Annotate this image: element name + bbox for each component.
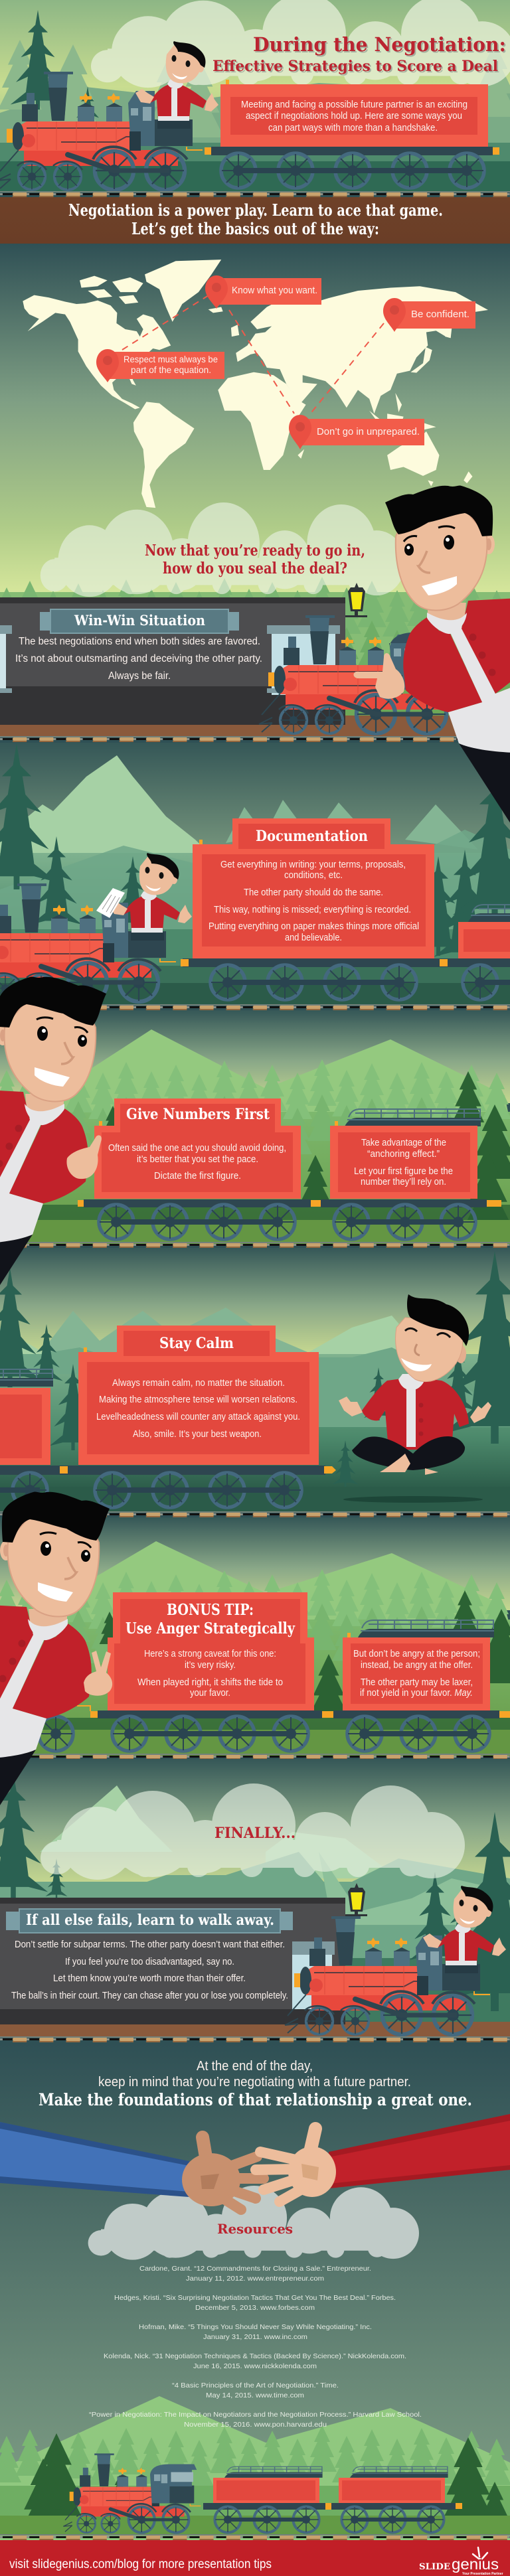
callout: know what you want — [205, 275, 321, 309]
mountains: closing — [0, 2396, 510, 2542]
forest: closing — [0, 2425, 510, 2486]
wagon: give numbers left — [78, 1099, 311, 1239]
text: walk away body: If you feel you’re too disadvantaged, say no. — [65, 1957, 234, 1967]
text: walk away body: The ball’s in their court. They can chase after you or lose you completely. — [11, 1991, 288, 2001]
heading: stay calm: Stay Calm — [159, 1335, 234, 1352]
text: stay calm body — [96, 1378, 300, 1440]
text: closing statement — [39, 2059, 472, 2109]
title: During the Negotiation: — [254, 35, 507, 57]
panel: world map background — [0, 244, 510, 725]
text: bonus right: if not yield in your favor. May. — [360, 1688, 473, 1699]
icon: document — [96, 888, 125, 918]
character: conductor in header — [135, 41, 218, 121]
locomotive: closing — [63, 2453, 201, 2533]
text: documentation body: This way, nothing is missed; everything is recorded. — [214, 905, 411, 915]
locomotive: win-win — [259, 615, 464, 733]
footer: Your Presentation Partner — [462, 2572, 503, 2576]
character: thumbs up man — [0, 977, 106, 1326]
text: bonus right: The other party may be laxer, — [361, 1677, 473, 1688]
panel: brown banner: Let’s get the basics out of the way: — [131, 219, 379, 238]
callout: be confident — [383, 298, 475, 332]
text: give numbers right: number they’ll rely on. — [361, 1177, 446, 1187]
text: closing statement: keep in mind that you’re negotiating with a future partner. — [98, 2075, 411, 2089]
text: win-win body: The best negotiations end when both sides are favored. — [19, 636, 260, 647]
heading: question — [145, 542, 365, 577]
panel: documentation background — [0, 743, 510, 1005]
panel: stay calm background — [0, 1248, 510, 1512]
callout: don't go in unprepared: Don’t go in unprepared. — [317, 426, 420, 437]
heading: resources: Resources — [217, 2221, 293, 2237]
locomotive: finally — [285, 1916, 490, 2034]
trees: closing dark — [20, 2433, 510, 2533]
icon: handshake arms — [0, 2114, 510, 2210]
text: give numbers left — [108, 1143, 286, 1181]
wagon: give numbers right — [311, 1109, 501, 1239]
text: walk away body: Don’t settle for subpar terms. The other party doesn’t want that either. — [15, 1939, 285, 1950]
trees: bonus dark — [100, 1590, 510, 1714]
heading: bonus tip: BONUS TIP: — [167, 1601, 254, 1619]
text: citations: June 16, 2015. www.nickkolenda.com — [193, 2362, 317, 2370]
trees: give numbers dark — [100, 1071, 510, 1225]
text: walk away body: Let them know you’re worth more than their offer. — [53, 1973, 246, 1984]
text: stay calm body: Always remain calm, no matter the situation. — [112, 1378, 285, 1389]
forest: behind station — [0, 577, 510, 638]
footer: visit slidegenius.com/blog for more presentation tips — [9, 2557, 272, 2571]
wagon: stay calm — [0, 1326, 336, 1507]
text: give numbers right: Take advantage of the — [361, 1138, 446, 1148]
footer — [0, 2540, 510, 2576]
text: intro paragraph: Meeting and facing a possible future partner is an exciting — [241, 100, 468, 110]
text: bonus left: it’s very risky. — [185, 1660, 236, 1671]
text: give numbers left: Dictate the first figure. — [154, 1171, 241, 1181]
text: bonus left: When played right, it shifts the tide to — [137, 1677, 283, 1688]
title: During the Negotiation: — [253, 33, 506, 56]
text: citations: Cardone, Grant. “12 Commandments for Closing a Sale.” Entrepreneur. — [139, 2265, 371, 2273]
text: stay calm body: Levelheadedness will counter any attack against you. — [96, 1412, 300, 1422]
text: give numbers right — [354, 1138, 453, 1187]
heading: finally: FINALLY... — [214, 1825, 296, 1842]
trees: documentation pines — [0, 743, 510, 962]
text: citations: January 11, 2012. www.entrepreneur.com — [186, 2275, 324, 2283]
text: documentation body: and believable. — [285, 933, 342, 943]
text: give numbers right: Let your first figure be the — [354, 1166, 453, 1177]
text: win-win body — [15, 636, 262, 682]
heading: win-win banner: Win-Win Situation — [74, 612, 205, 629]
text: bonus left: Here’s a strong caveat for this one: — [144, 1649, 276, 1659]
character: peace sign man — [0, 1492, 112, 1841]
text: citations: Kolenda, Nick. “31 Negotiation Techniques & Tactics (Backed By Science).” NickKolenda.com. — [104, 2352, 406, 2360]
text: bonus right: instead, be angry at the offer. — [361, 1660, 473, 1671]
text: closing statement: At the end of the day, — [197, 2059, 313, 2074]
heading: bonus tip — [126, 1601, 296, 1637]
text: win-win body: Always be fair. — [108, 670, 171, 682]
text: stay calm body: Making the atmosphere tense will worsen relations. — [99, 1395, 298, 1405]
panel: win-win station — [0, 597, 345, 725]
route: dashed lines between pins — [122, 295, 384, 415]
footer: SLIDE — [419, 2562, 450, 2572]
locomotive wheel: bonus — [39, 1716, 73, 1751]
text: win-win body: It’s not about outsmarting and deceiving the other party. — [15, 653, 262, 664]
text: citations: May 14, 2015. www.time.com — [206, 2391, 304, 2399]
ground: finally — [0, 2022, 510, 2038]
callout: don't go in unprepared — [289, 415, 424, 449]
heading: walk away banner: If all else fails, learn to walk away. — [26, 1912, 274, 1929]
heading: win-win banner — [40, 609, 239, 633]
heading: question: how do you seal the deal? — [163, 560, 347, 577]
text: give numbers left: Often said the one act you should avoid doing, — [108, 1143, 286, 1154]
wagon: documentation — [181, 818, 510, 1000]
wagons: closing — [203, 2466, 462, 2533]
text: documentation body: The other party should do the same. — [244, 887, 383, 898]
text: intro paragraph: aspect if negotiations hold up. Here are some ways you — [246, 111, 462, 121]
character: pointing man — [353, 486, 510, 835]
panel: header scene — [0, 0, 510, 192]
cloud: header — [91, 0, 510, 88]
text: give numbers left: it’s better that you set the pace. — [137, 1154, 258, 1165]
title: Effective Strategies to Score a Deal — [212, 58, 498, 75]
text: documentation body: Putting everything on paper makes things more official — [209, 921, 419, 932]
locomotive: header — [0, 72, 203, 190]
text: citations — [89, 2265, 422, 2429]
text: citations: January 31, 2011. www.inc.com — [203, 2333, 307, 2341]
cloud: resources — [88, 2186, 419, 2260]
character: meditating — [339, 1294, 491, 1503]
title: Effective Strategies to Score a Deal — [214, 59, 499, 76]
wagon: header intro — [205, 80, 499, 188]
text: documentation body: Get everything in writing: your terms, proposals, — [220, 860, 406, 870]
cloud: question — [41, 502, 405, 597]
text: citations: “4 Basic Principles of the Art of Negotiation.” Time. — [172, 2382, 339, 2389]
tree: header pine — [11, 10, 106, 153]
callout: be confident: Be confident. — [411, 309, 469, 320]
text: documentation body — [209, 860, 419, 943]
footer: genius — [452, 2555, 499, 2573]
panel: bonus tip background — [0, 1517, 510, 1756]
locomotive: documentation — [0, 883, 176, 1002]
text: intro paragraph: can part ways with more than a handshake. — [268, 123, 438, 133]
icon: street lamp finally — [345, 1883, 367, 1916]
heading: walk away banner — [6, 1909, 293, 1933]
text: citations: “Power in Negotiation: The Impact on Negotiators and the Negotiation Process.” Harvard Law School. — [89, 2411, 422, 2419]
text: citations: November 15, 2016. www.pon.harvard.edu — [184, 2421, 327, 2429]
text: stay calm body: Also, smile. It’s your best weapon. — [133, 1429, 262, 1440]
text: citations: Hedges, Kristi. “Six Surprising Negotiation Tactics That Get You The Best Deal.” Forbes. — [114, 2294, 396, 2302]
panel: finally station — [0, 1898, 345, 2024]
text: bonus left — [137, 1649, 283, 1699]
cloud: finally — [41, 1783, 465, 1880]
map: world continents — [23, 260, 488, 508]
text: walk away body — [11, 1939, 288, 2001]
character: holding document — [109, 853, 192, 933]
text: intro paragraph — [241, 100, 468, 133]
character: conductor finally — [423, 1886, 506, 1965]
text: bonus right: But don’t be angry at the person; — [353, 1649, 480, 1659]
panel: brown banner — [0, 197, 510, 244]
forest: give numbers — [0, 1059, 510, 1120]
text: bonus left: your favor. — [190, 1688, 230, 1699]
heading: documentation: Documentation — [256, 828, 368, 845]
callout: respect: part of the equation. — [131, 364, 211, 375]
callout: respect: Respect must always be — [124, 354, 218, 364]
ground: win-win — [0, 677, 510, 737]
text: citations: December 5, 2013. www.forbes.com — [195, 2304, 315, 2312]
panel: finally background — [0, 1759, 510, 2038]
text: citations: Hofman, Mike. “5 Things You Should Never Say While Negotiating.” Inc. — [139, 2323, 372, 2331]
wagon: bonus right — [322, 1620, 510, 1751]
panel: closing background — [0, 2043, 510, 2541]
heading: give numbers first: Give Numbers First — [126, 1106, 270, 1123]
title — [212, 33, 507, 76]
text: bonus right — [353, 1649, 480, 1699]
wagon: bonus left — [77, 1592, 322, 1751]
trees: stay calm pines — [0, 1251, 510, 1487]
forest: bonus — [0, 1569, 510, 1630]
callout: respect — [96, 349, 224, 382]
heading: bonus tip: Use Anger Strategically — [126, 1620, 296, 1637]
trees: finally pines — [0, 1772, 510, 2011]
text: give numbers right: “anchoring effect.” — [367, 1149, 440, 1160]
heading: question: Now that you’re ready to go in, — [145, 542, 365, 560]
panel: give numbers background — [0, 1010, 510, 1245]
callout: know what you want: Know what you want. — [232, 285, 317, 296]
text: documentation body: conditions, etc. — [284, 870, 343, 881]
icon: street lamp — [345, 583, 367, 617]
